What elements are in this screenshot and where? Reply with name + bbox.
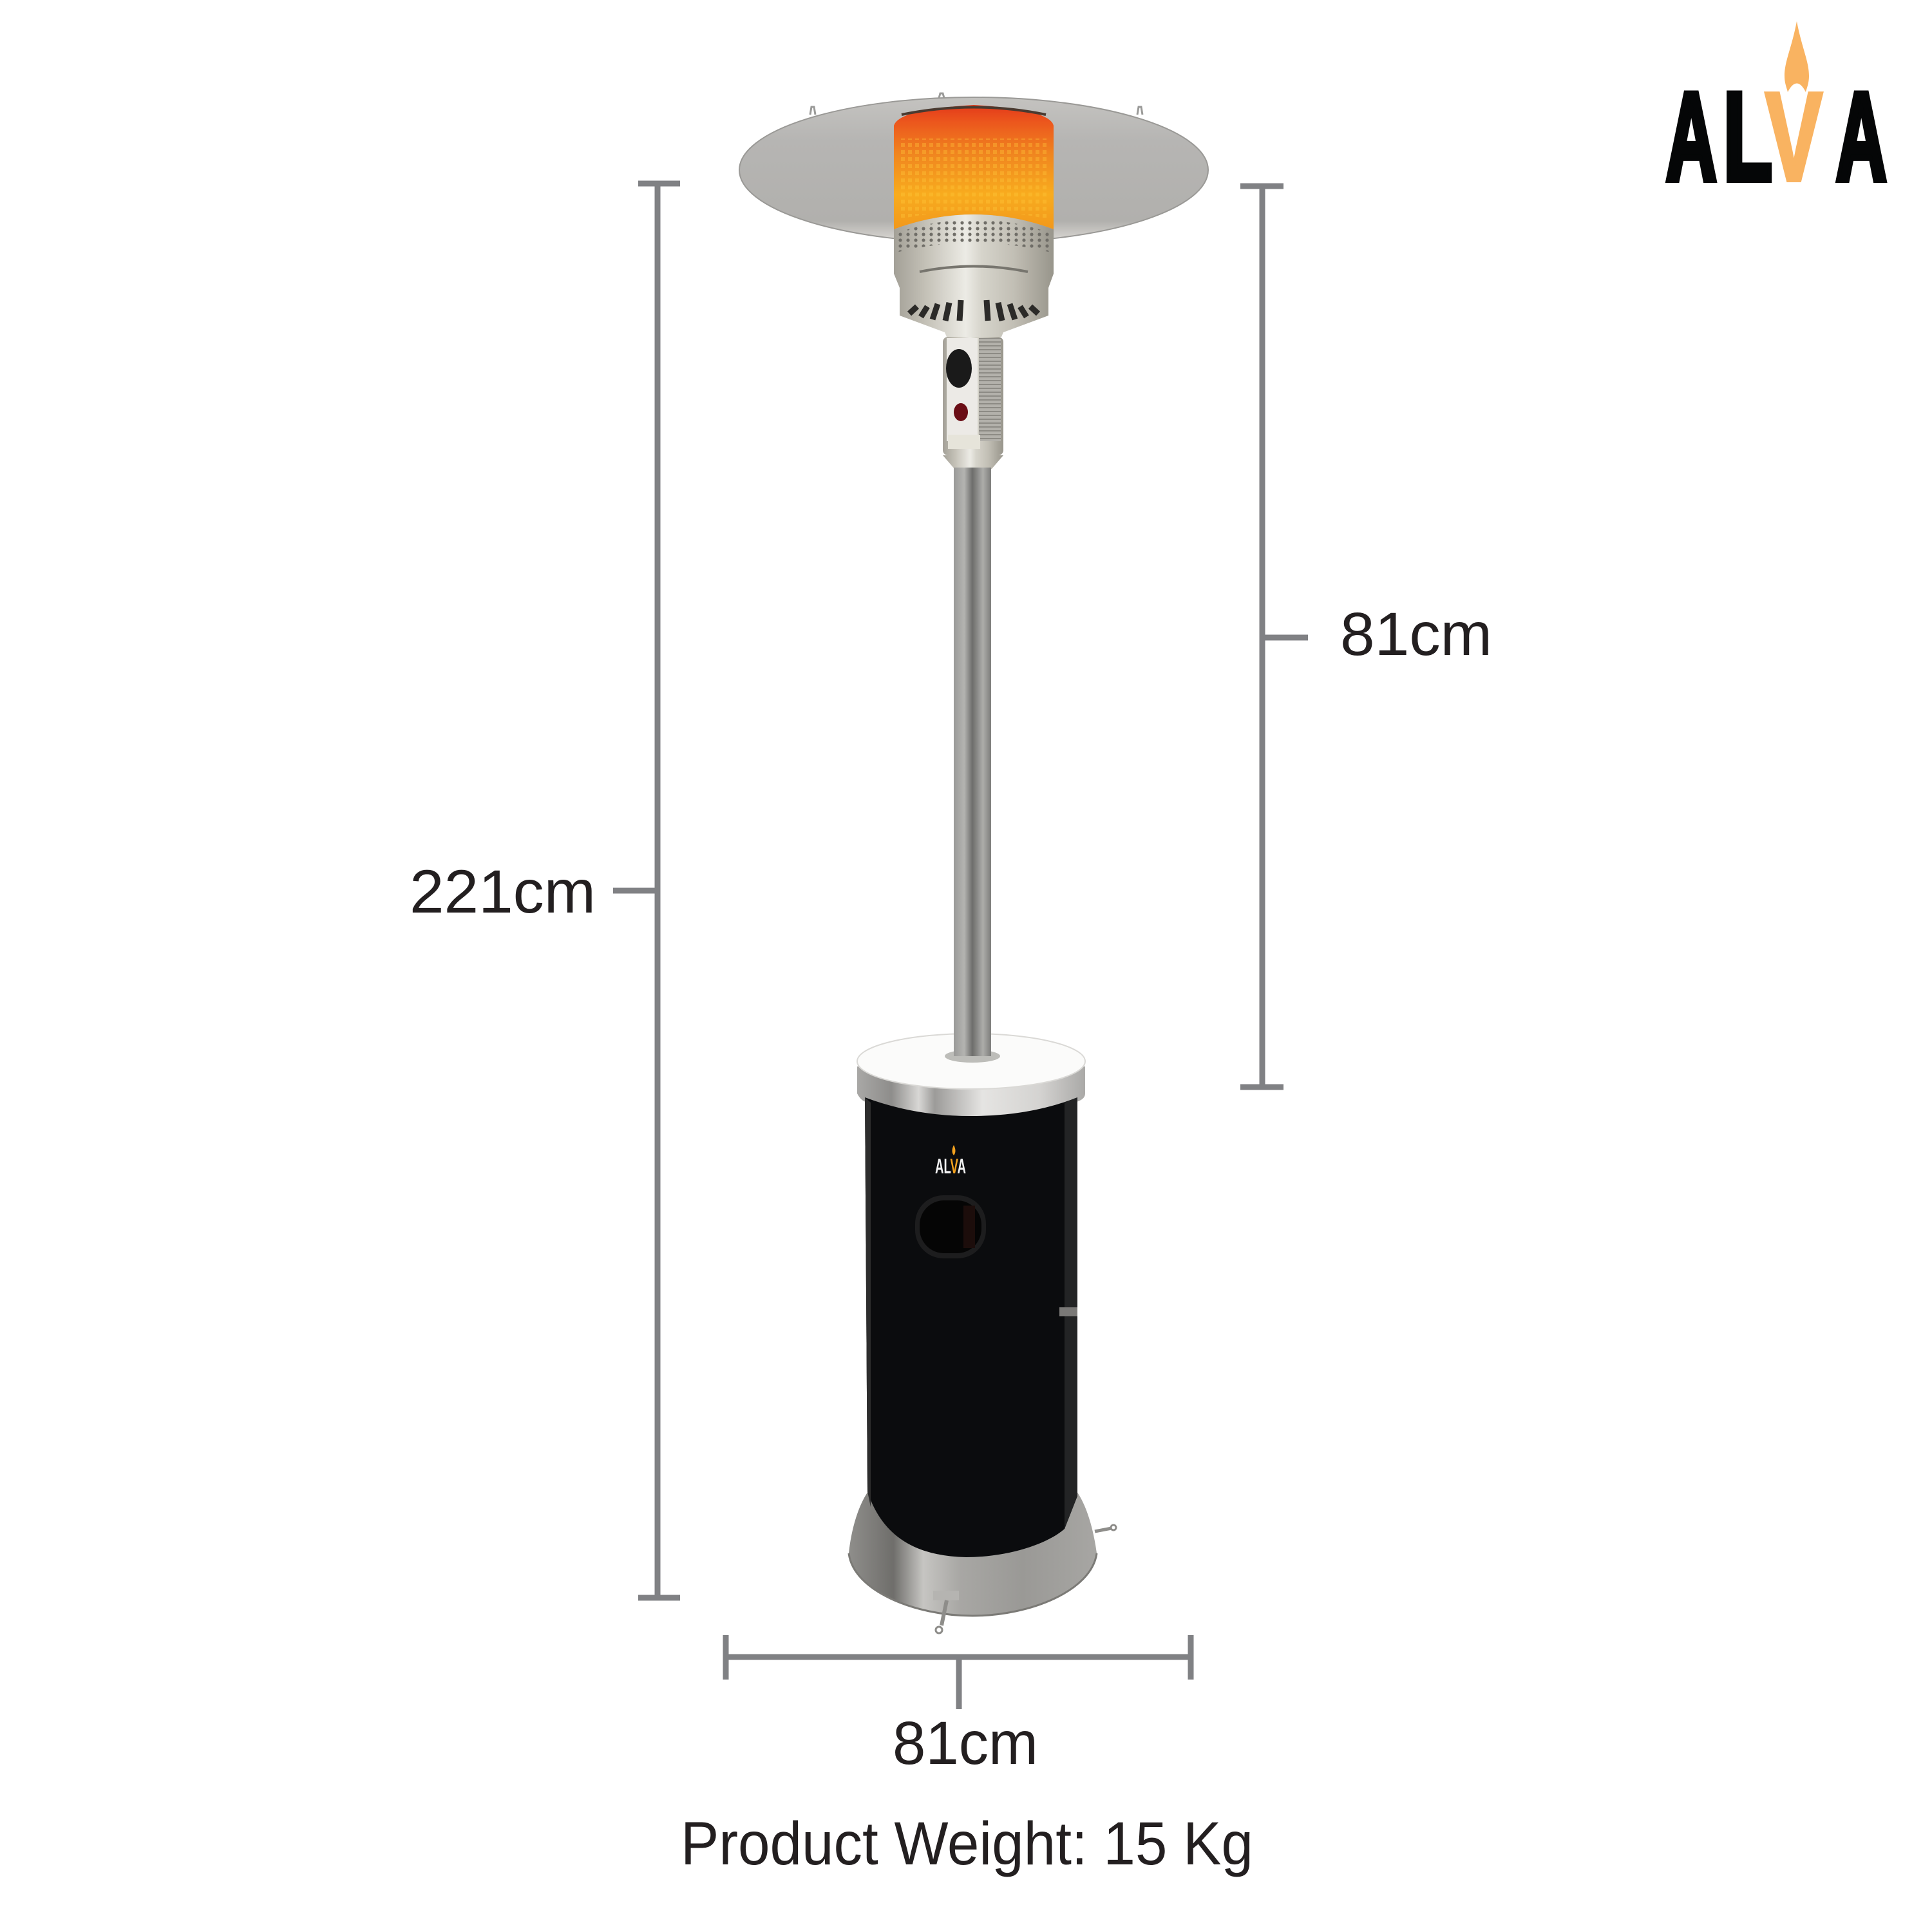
label right 81cm: 81cm — [1340, 600, 1492, 668]
dimension: total height 221cm — [410, 184, 680, 1598]
logo wordmark: L — [1723, 67, 1772, 207]
small body logo — [935, 1145, 966, 1178]
brand logo — [1666, 21, 1886, 207]
logo flame — [1785, 21, 1809, 92]
base ring — [849, 1492, 1116, 1633]
logo wordmark: A — [1836, 68, 1886, 207]
control box — [943, 337, 1003, 469]
small body logo: ALVA — [935, 1155, 966, 1178]
label 221cm: 221cm — [410, 858, 596, 926]
vertical pole — [954, 468, 991, 1060]
base cap disc — [857, 1005, 1085, 1116]
logo wordmark — [1666, 66, 1886, 207]
black cylinder body — [865, 1097, 1077, 1557]
dimension: base width 81cm — [726, 1635, 1191, 1777]
logo wordmark: V — [1765, 66, 1823, 207]
dimension: upper height 81cm — [1240, 186, 1492, 1087]
product weight caption: Product Weight: 15 Kg — [681, 1810, 1253, 1878]
label bottom 81cm: 81cm — [893, 1709, 1038, 1777]
heater product illustration — [739, 93, 1208, 1633]
logo wordmark: A — [1666, 68, 1716, 207]
glowing burner screen — [894, 105, 1054, 229]
reflector dish — [739, 93, 1208, 243]
burner housing — [894, 214, 1054, 337]
body handle slot — [915, 1195, 986, 1258]
